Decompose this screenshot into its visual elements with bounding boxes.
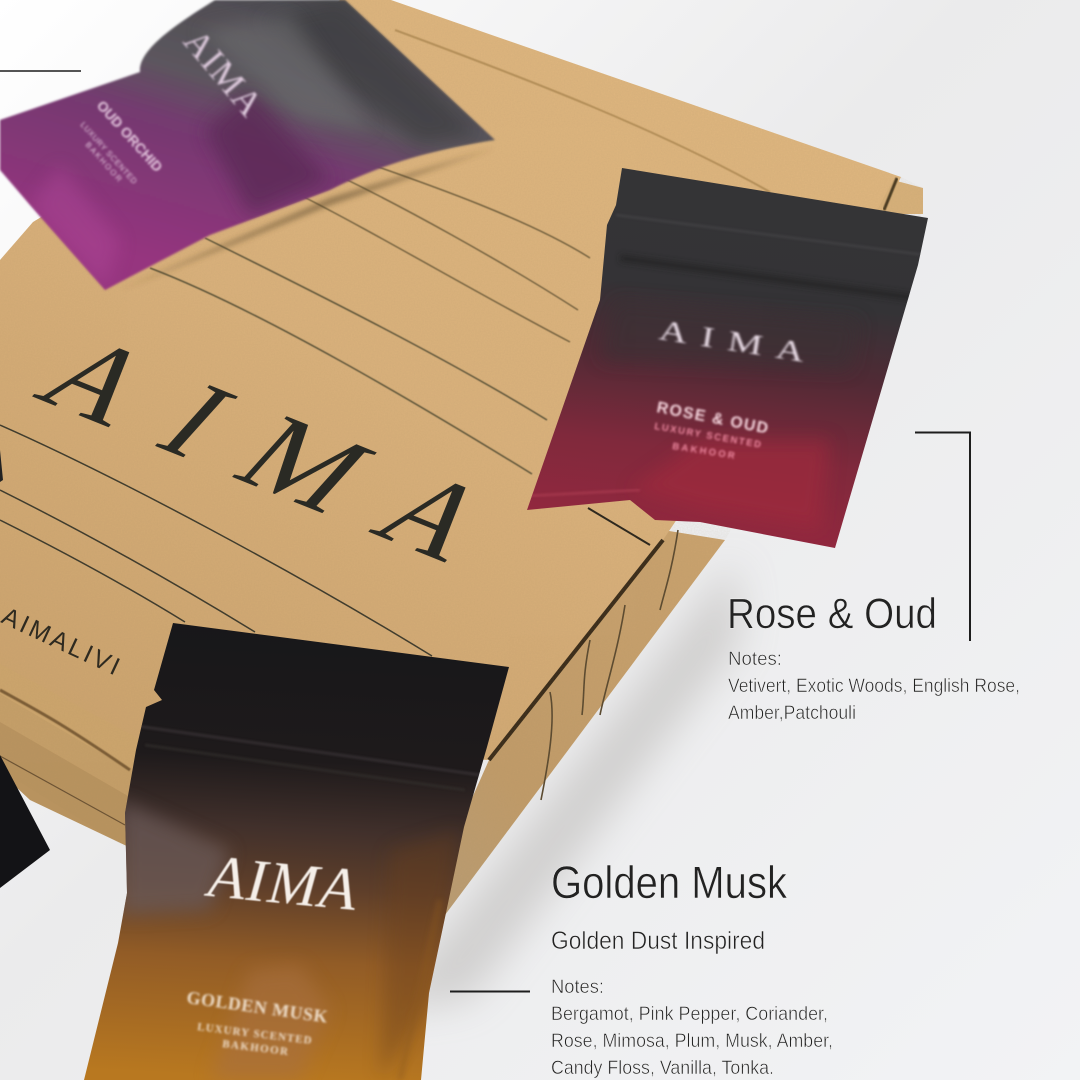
golden pouch label (185, 987, 329, 1058)
box lower side (0, 660, 140, 850)
pouch label: BAKHOOR (84, 140, 124, 184)
pouch wordmark: AIMA (176, 21, 271, 124)
box printed lines (0, 30, 770, 656)
box wordmark: AIMA (12, 314, 561, 600)
golden pouch folds (120, 725, 480, 1080)
golden musk notes: Candy Floss, Vanilla, Tonka. (551, 1057, 774, 1079)
rose and oud pouch (527, 168, 928, 548)
box right side face (400, 530, 725, 960)
pouch label: OUD ORCHID (94, 97, 166, 175)
top left rule (0, 70, 81, 72)
rose pouch label: ROSE & OUD (655, 399, 769, 437)
box top face (0, 0, 901, 760)
rose pouch wordmark: AIMA (657, 315, 820, 371)
rose and oud heading: Rose & Oud (727, 590, 937, 638)
box front rim (0, 664, 145, 778)
golden pouch label: BAKHOOR (222, 1038, 290, 1058)
golden musk text block (551, 857, 833, 1079)
golden musk heading: Golden Musk (551, 857, 787, 908)
rose and oud text block (727, 590, 1020, 724)
golden musk notes: Bergamot, Pink Pepper, Coriander, (551, 1003, 828, 1025)
cardboard grain (23, 178, 921, 793)
rose pouch folds (527, 215, 925, 530)
golden musk notes: Rose, Mimosa, Plum, Musk, Amber, (551, 1030, 833, 1052)
rose and oud notes: Notes: (728, 648, 782, 670)
box shadow (380, 560, 740, 1010)
box corner flap (875, 180, 923, 214)
golden pouch wordmark: AIMA (202, 843, 360, 923)
pouch label: LUXURY SCENTED (79, 120, 139, 186)
golden musk notes (551, 976, 833, 1079)
golden pouch body (84, 623, 509, 1080)
small black pouch (0, 755, 50, 888)
rose and oud notes: Vetivert, Exotic Woods, English Rose, (728, 675, 1020, 697)
rose pouch label: BAKHOOR (672, 441, 736, 462)
pouch shadow (120, 148, 495, 290)
box side tabs (541, 530, 678, 800)
purple pouch (0, 0, 495, 290)
golden musk notes: Notes: (551, 976, 604, 998)
pouch body (0, 0, 495, 290)
rose and oud notes: Amber,Patchouli (728, 702, 856, 724)
rose pouch label: LUXURY SCENTED (653, 421, 762, 451)
rose and oud bracket (915, 432, 970, 641)
pouch folds (30, 0, 480, 290)
golden pouch label: LUXURY SCENTED (197, 1021, 312, 1047)
box website text: AIMALIVI (0, 602, 127, 682)
box groove (489, 540, 663, 760)
golden musk subtitle: Golden Dust Inspired (551, 927, 765, 955)
rose pouch body (527, 168, 928, 548)
cardboard box (0, 0, 923, 914)
rose and oud notes (728, 648, 1020, 724)
box flap shading (0, 694, 140, 800)
rose pouch label (653, 399, 769, 462)
golden musk rule (450, 990, 530, 992)
black sliver (0, 450, 3, 482)
golden musk pouch (84, 623, 509, 1080)
golden pouch label: GOLDEN MUSK (185, 987, 329, 1027)
